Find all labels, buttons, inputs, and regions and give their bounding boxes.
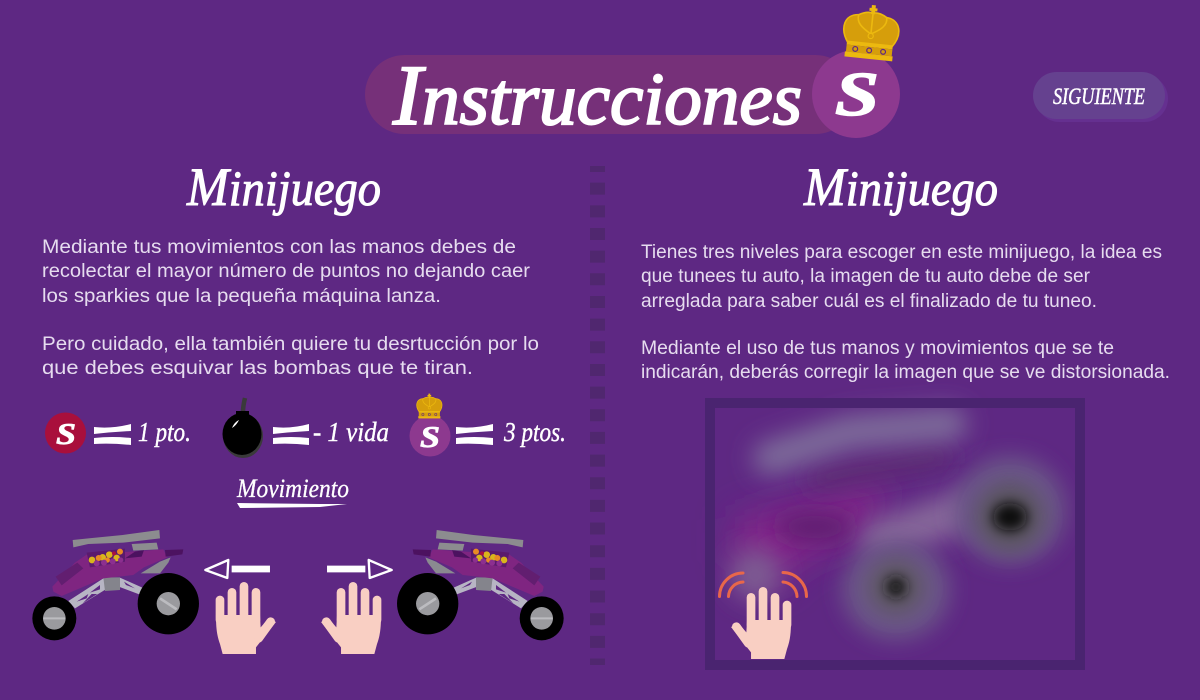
logo: crowned S <box>812 2 901 138</box>
button: siguiente <box>1033 72 1168 122</box>
red S token: S <box>56 416 76 451</box>
hand with motion arcs <box>720 572 806 659</box>
distorted car image <box>729 424 1066 640</box>
arrow: right <box>327 560 392 578</box>
equals sign <box>456 424 493 445</box>
right text block: arreglada para saber cuál es el finalizado de tu tuneo. <box>641 291 1097 312</box>
right car with gesture <box>321 530 564 654</box>
heading: right minijuego: Minijuego <box>803 157 998 217</box>
right text block: Mediante el uso de tus manos y movimientos que se te <box>641 338 1114 359</box>
equals sign <box>273 424 309 445</box>
blurred body <box>735 480 890 590</box>
left text block: los sparkies que la pequeña máquina lanza. <box>42 286 441 307</box>
heading: left minijuego: Minijuego <box>186 157 381 217</box>
left car with gesture <box>32 530 276 654</box>
right text block: Tienes tres niveles para escoger en este minijuego, la idea es <box>641 242 1162 263</box>
car: right <box>397 530 564 640</box>
hand: left <box>216 586 276 654</box>
title banner <box>365 47 855 143</box>
right text block <box>641 242 1170 383</box>
equals sign <box>94 424 131 445</box>
left text block: Pero cuidado, ella también quiere tu desrtucción por lo <box>42 334 539 355</box>
blurred spot behind hand <box>729 549 781 601</box>
blurred big wheel <box>954 456 1066 564</box>
right text block: indicarán, deberás corregir la imagen que se ve distorsionada. <box>641 362 1170 383</box>
left text block <box>42 237 539 379</box>
minus one life label: - 1 vida <box>313 417 389 447</box>
left text block: que debes esquivar las bombas que te tiran. <box>42 358 473 379</box>
crowned S token: S <box>420 419 440 454</box>
image frame <box>710 403 1080 665</box>
title pill <box>365 55 855 134</box>
arrow: left <box>205 560 270 578</box>
logo: crowned S: S <box>835 61 879 129</box>
blurred small wheel <box>842 540 950 640</box>
bomb icon <box>222 398 263 458</box>
divider <box>590 166 605 665</box>
right text block: que tunees tu auto, la imagen de tu auto debe de ser <box>641 266 1091 287</box>
legend: scoring <box>45 394 566 458</box>
one point label: 1 pto. <box>138 417 191 447</box>
button: siguiente: SIGUIENTE <box>1053 84 1145 109</box>
red S token <box>45 412 86 454</box>
hand: right <box>321 586 381 654</box>
car: left <box>32 530 199 640</box>
three points label: 3 ptos. <box>503 417 566 447</box>
hand: tap <box>731 591 791 659</box>
title text: Instrucciones <box>392 47 802 143</box>
motion arcs <box>720 572 806 596</box>
blurred suspension <box>880 510 965 540</box>
left text block: recolectar el mayor número de puntos no dejando caer <box>42 261 531 282</box>
crowned S token <box>410 394 450 456</box>
movement label: Movimiento <box>236 474 349 503</box>
left text block: Mediante tus movimientos con las manos debes de <box>42 237 516 258</box>
blurred guns <box>770 424 950 458</box>
